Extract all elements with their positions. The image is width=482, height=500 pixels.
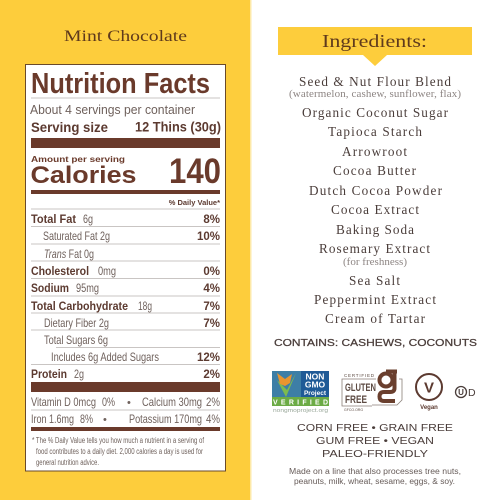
footnote: food contributes to a daily diet. 2,000 calories a day is used for <box>36 447 203 456</box>
icon: orthodox union kosher dairy <box>456 386 476 399</box>
sodium row: 95mg <box>76 281 99 295</box>
allergen processing note <box>289 467 461 486</box>
serving size row: 12 Thins (30g) <box>135 120 221 134</box>
ingredients list: Dutch Cocoa Powder <box>309 183 443 198</box>
ingredients list: Cocoa Extract <box>331 202 419 217</box>
mineral row: 4% <box>206 412 220 426</box>
icon: vegan <box>416 374 442 411</box>
serving size row: Serving size <box>31 120 108 135</box>
ingredients banner <box>278 27 472 66</box>
allergen processing note: Made on a line that also processes tree nuts, <box>289 467 461 476</box>
vitamin row: Vitamin D 0mcg <box>31 395 96 409</box>
sodium row: Sodium <box>31 283 69 295</box>
ingredients list: (watermelon, cashew, sunflower, flax) <box>289 88 461 100</box>
icon: non gmo project verified: NON <box>306 372 324 382</box>
icon: vegan: Vegan <box>420 405 438 411</box>
ingredients list: Cream of Tartar <box>325 311 426 326</box>
mineral row: 8% <box>80 412 93 426</box>
dietary fiber row <box>44 316 220 330</box>
vitamin row: Calcium 30mg <box>142 395 202 409</box>
sodium row <box>31 281 220 295</box>
added sugars row: 12% <box>197 352 220 364</box>
cholesterol row: 0% <box>203 266 220 278</box>
icon: orthodox union kosher dairy: D <box>468 387 476 399</box>
calories row: Calories <box>30 162 136 189</box>
dietary fiber row: 7% <box>203 318 220 330</box>
protein row: 2g <box>74 367 84 381</box>
free-from claims: CORN FREE • GRAIN FREE <box>297 423 453 434</box>
serving size row <box>31 120 221 135</box>
saturated fat row: 10% <box>197 231 220 243</box>
protein row <box>31 367 220 381</box>
footnote: * The % Daily Value tells you how much a nutrient in a serving of <box>32 436 205 445</box>
total fat row: Total Fat <box>31 214 76 226</box>
mineral row: • <box>103 414 107 426</box>
icon: non gmo project verified: GMO <box>305 380 326 390</box>
icon: non gmo project verified: nongmoproject.org <box>273 408 328 414</box>
trans fat row: Trans Fat 0g <box>44 247 94 261</box>
total carbohydrate row: 18g <box>138 299 152 313</box>
total sugars row: Total Sugars 6g <box>44 333 108 347</box>
free-from claims <box>297 423 453 460</box>
daily value header: % Daily Value* <box>169 198 220 207</box>
servings text: About 4 servings per container <box>30 102 196 117</box>
calories row: Amount per serving <box>31 154 125 164</box>
free-from claims: GUM FREE • VEGAN <box>316 436 434 447</box>
total fat row: 8% <box>203 214 220 226</box>
ingredients list: Seed & Nut Flour Blend <box>299 74 451 89</box>
cholesterol row: 0mg <box>98 264 116 278</box>
protein row: Protein <box>31 369 67 381</box>
icon: certified gluten free <box>342 372 402 412</box>
calories row <box>30 152 221 191</box>
cholesterol row <box>31 264 220 278</box>
total carbohydrate row: 7% <box>203 301 220 313</box>
vitamin row <box>31 395 220 409</box>
total fat row <box>31 212 220 226</box>
footnote <box>32 436 205 467</box>
ingredients list: Baking Soda <box>336 222 414 237</box>
icon: orthodox union kosher dairy: U <box>458 388 464 397</box>
total fat row: 6g <box>83 212 93 226</box>
icon: certified gluten free: FREE <box>345 394 367 406</box>
saturated fat row: Saturated Fat 2g <box>43 229 110 243</box>
ingredients list: Rosemary Extract <box>319 241 430 256</box>
ingredients list: Peppermint Extract <box>314 292 436 307</box>
icon: non gmo project verified: VERIFIED <box>273 400 328 406</box>
ingredients list: Sea Salt <box>349 273 400 288</box>
product name heading: Mint Chocolate <box>64 28 187 45</box>
total carbohydrate row <box>31 299 220 313</box>
saturated fat row <box>43 229 220 243</box>
nutrition facts title: Nutrition Facts <box>31 68 210 100</box>
icon: non gmo project verified <box>272 371 329 414</box>
total carbohydrate row: Total Carbohydrate <box>31 301 128 313</box>
dietary fiber row: Dietary Fiber 2g <box>44 316 109 330</box>
allergen processing note: peanuts, milk, wheat, sesame, eggs, & soy. <box>294 477 455 486</box>
icon: certified gluten free: GFCO.ORG <box>344 408 363 412</box>
ingredients list: Organic Coconut Sugar <box>302 105 449 120</box>
protein row: 2% <box>203 369 220 381</box>
sodium row: 4% <box>203 283 220 295</box>
ingredients list: Cocoa Butter <box>333 163 417 178</box>
vitamin row: 2% <box>206 395 220 409</box>
ingredients list: (for freshness) <box>343 256 407 268</box>
added sugars row: Includes 6g Added Sugars <box>51 350 159 364</box>
cholesterol row: Cholesterol <box>31 266 89 278</box>
ingredients banner: Ingredients: <box>322 31 427 51</box>
icon: certified gluten free: GLUTEN <box>345 382 376 394</box>
ingredients list: Arrowroot <box>342 144 407 159</box>
icon: vegan: V <box>424 380 434 396</box>
ingredients list: Tapioca Starch <box>328 124 422 139</box>
calories row: 140 <box>169 152 221 191</box>
vitamin row: 0% <box>102 395 115 409</box>
ingredients list <box>289 74 461 326</box>
free-from claims: PALEO-FRIENDLY <box>322 449 428 460</box>
vitamin row: • <box>127 397 131 409</box>
icon: non gmo project verified: Project <box>304 390 327 397</box>
mineral row: Iron 1.6mg <box>31 412 74 426</box>
mineral row: Potassium 170mg <box>129 412 202 426</box>
mineral row <box>31 412 220 426</box>
allergen statement: CONTAINS: CASHEWS, COCONUTS <box>274 338 477 349</box>
panel: nutrition facts label <box>26 64 226 471</box>
icon: certified gluten free: CERTIFIED <box>344 373 375 378</box>
footnote: general nutrition advice. <box>36 458 99 467</box>
